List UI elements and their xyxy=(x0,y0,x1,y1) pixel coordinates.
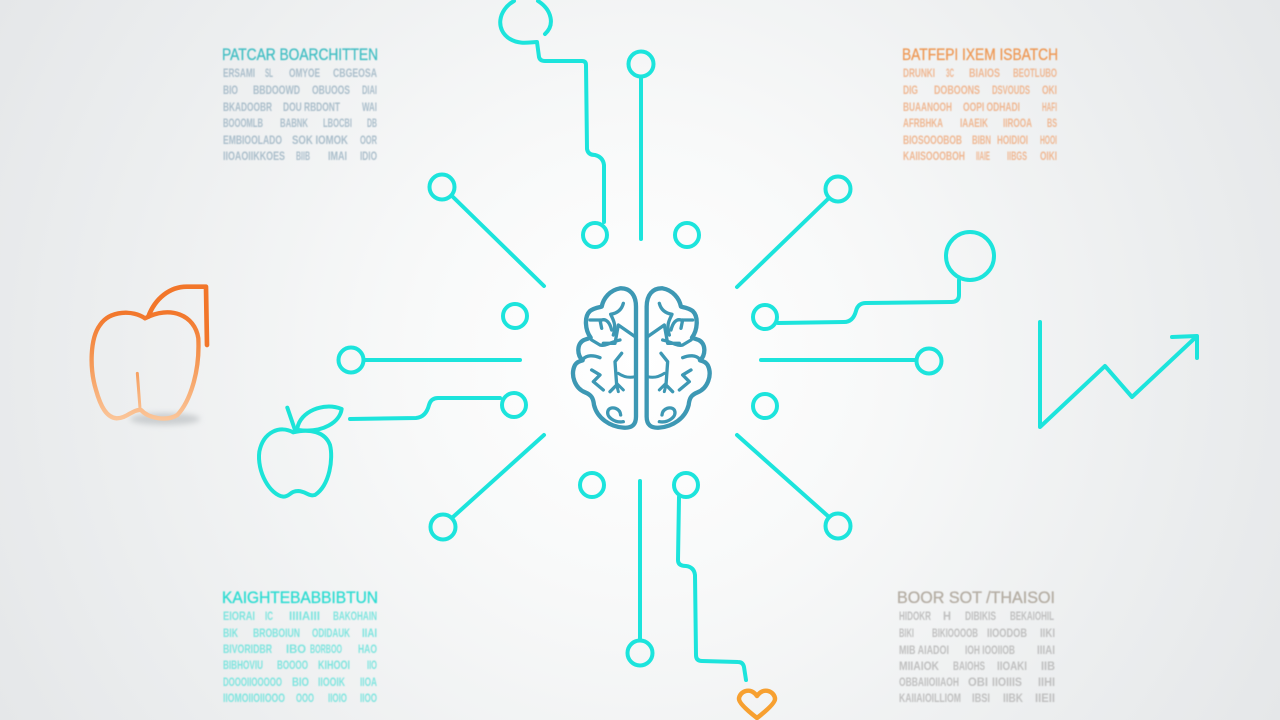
body text: bottom left: IIOA xyxy=(360,677,377,689)
body text: top left: OMYOE xyxy=(289,68,320,80)
connector: bottom to heart xyxy=(674,473,746,680)
body text: top left: BOOOMLB xyxy=(223,118,263,130)
body text: bottom right: KAIIAIOILLIOM xyxy=(899,693,961,705)
body text: top right: 3C xyxy=(946,68,954,80)
body text: top right: IAAEIK xyxy=(960,118,988,130)
body text: top left: SL xyxy=(265,68,273,80)
icon: orange heart xyxy=(739,691,775,718)
body text: bottom right: IIOODOB xyxy=(987,628,1027,640)
body text: bottom right: IIHI xyxy=(1038,677,1055,689)
body text: bottom left: EIORAI xyxy=(223,611,255,623)
body text: top left: BBDOOWD xyxy=(253,85,300,97)
body text: top right: DIG xyxy=(903,85,918,97)
body text: top right: BUAANOOH xyxy=(903,102,952,114)
body text: bottom left: ODIDAUK xyxy=(312,628,350,640)
body text: top right: BIBN xyxy=(972,135,991,147)
body text: top left: LBOCBI xyxy=(323,118,352,130)
body text: bottom right: H xyxy=(943,611,951,623)
icon: orange apple xyxy=(92,287,207,425)
node: bottom left of centre xyxy=(580,473,604,497)
body text: bottom right: IIKI xyxy=(1040,628,1055,640)
connector: upper left diagonal xyxy=(430,174,544,286)
body text: top left: BKADOOBR xyxy=(223,102,272,114)
body text: bottom left: BIVORIDBR xyxy=(223,644,273,656)
body text: bottom right xyxy=(899,611,1055,705)
heading: top left: PATCAR BOARCHITTEN xyxy=(222,46,378,64)
body text: bottom right: IIEII xyxy=(1035,693,1055,705)
body text: top right: DRUNKI xyxy=(903,68,935,80)
body text: bottom right: IBSI xyxy=(972,693,990,705)
brain: left hemisphere xyxy=(573,288,636,428)
body text: bottom left: BAKOHAIN xyxy=(333,611,377,623)
body text: bottom left: BROBOIUN xyxy=(253,628,300,640)
body text: bottom right: BIKI xyxy=(899,628,914,640)
connector: top large node xyxy=(500,1,607,247)
connector: right large node xyxy=(753,232,994,329)
node: right lower xyxy=(753,394,777,418)
text block: bottom left xyxy=(222,589,378,705)
body text: top left: BIO xyxy=(223,85,238,97)
body text: bottom right: BEKAIOHIL xyxy=(1010,611,1054,623)
body text: bottom left: KIHOOI xyxy=(318,660,350,672)
network connectors xyxy=(338,1,994,680)
body text: bottom right: MIIAIOK xyxy=(899,661,940,673)
body text: bottom left: DOOOIIOOOOO xyxy=(223,677,282,689)
connector: right straight xyxy=(761,348,942,374)
connector: lower right diagonal xyxy=(737,435,850,538)
body text: top left: IIOAOIIKKOES xyxy=(223,151,285,163)
body text: top right: BS xyxy=(1047,118,1057,130)
body text: top left: BABNK xyxy=(280,118,308,130)
body text: top left: DOU RBDONT xyxy=(283,102,340,114)
body text: top left: OOR xyxy=(360,135,377,147)
body text: top left: SOK IOMOK xyxy=(292,135,349,147)
body text: bottom left: IIIIAIII xyxy=(289,611,320,623)
node: top right of centre xyxy=(675,223,699,247)
body text: top left: ERSAMI xyxy=(223,68,255,80)
body text: bottom right: HIDOKR xyxy=(899,611,931,623)
body text: top left: EMBIOOLADO xyxy=(223,135,282,147)
body text: bottom right: MIB AIADOI xyxy=(899,645,949,657)
brain: right hemisphere xyxy=(647,288,710,428)
heading: bottom left: KAIGHTEBABBIBTUN xyxy=(222,589,378,607)
connector: bottom straight xyxy=(628,481,652,666)
connector: lower left diagonal xyxy=(430,435,544,540)
body text: bottom right: IOH IOOIIOB xyxy=(965,645,1015,657)
body text: top left: IMAI xyxy=(328,151,347,163)
body text: top right: BIOSOOOBOB xyxy=(903,135,962,147)
body text: bottom right: DIBIKIS xyxy=(965,611,996,623)
body text: bottom left: BORBOO xyxy=(310,644,342,656)
body text: bottom right: IIOAKI xyxy=(997,661,1027,673)
body text: top right: BIAIOS xyxy=(969,68,1000,80)
body text: bottom right: OBI xyxy=(968,677,988,689)
body text: top right: IIAIE xyxy=(976,151,990,163)
body text: bottom left: IIO xyxy=(367,660,377,672)
body text: top right: IIBGS xyxy=(1007,151,1027,163)
body text: top right: DOBOONS xyxy=(934,85,980,97)
chart: rising trend arrow xyxy=(1040,322,1197,427)
body text: top right: BEOTLUBO xyxy=(1013,68,1057,80)
body text: bottom right: IIBK xyxy=(1003,693,1024,705)
body text: bottom left: BOOOO xyxy=(277,660,308,672)
body text: bottom right: IIB xyxy=(1041,661,1055,673)
body text: top right: AFRBHKA xyxy=(903,118,943,130)
body text: bottom left: IBO xyxy=(286,644,306,656)
body text: bottom right: BIKIOOOOB xyxy=(932,628,978,640)
text block: top right xyxy=(902,46,1058,163)
text block: top left xyxy=(222,46,378,163)
body text: bottom left: IIAI xyxy=(362,628,377,640)
icon: teal apple xyxy=(259,407,342,497)
body text: top left xyxy=(223,68,377,163)
connector: upper right diagonal xyxy=(737,176,850,287)
body text: top left: CBGEOSA xyxy=(333,68,377,80)
body text: top right: OOPI ODHADI xyxy=(963,102,1020,114)
heading: bottom right: BOOR SOT /THAISOI xyxy=(897,589,1055,607)
body text: top right: DSVOUDS xyxy=(992,85,1030,97)
body text: top right: OIKI xyxy=(1040,151,1057,163)
body text: top left: DIAI xyxy=(362,85,377,97)
body text: top right: HOIDIOI xyxy=(997,135,1028,147)
heading: top right: BATFEPI IXEM ISBATCH xyxy=(902,46,1058,64)
body text: bottom right: BAIOHS xyxy=(953,661,985,673)
body text: bottom left: IIOOIK xyxy=(318,677,346,689)
body text: top left: WAI xyxy=(362,102,377,114)
body text: top right: HOOI xyxy=(1040,135,1057,147)
body text: bottom left: IIOMOIIOIIOOO xyxy=(223,693,285,705)
connector: left to apple xyxy=(350,393,526,419)
body text: bottom left: IIOIO xyxy=(328,693,347,705)
body text: top left: BIIB xyxy=(296,151,310,163)
body text: top right: KAIISOOOBOH xyxy=(903,151,965,163)
body text: bottom right: IIOIIIS xyxy=(992,677,1022,689)
body text: bottom right: OBBAIIOIIAOH xyxy=(899,677,959,689)
body text: bottom left: IIOO xyxy=(360,693,377,705)
body text: bottom left xyxy=(223,611,377,705)
body text: bottom right: IIIAI xyxy=(1037,645,1055,657)
body text: bottom left: BIO xyxy=(292,677,309,689)
body text: top left: DB xyxy=(367,118,377,130)
body text: top right: OKI xyxy=(1042,85,1057,97)
text block: bottom right xyxy=(897,589,1055,705)
icon: central brain xyxy=(573,288,710,428)
body text: bottom left: BIBHOVIU xyxy=(223,660,263,672)
body text: top right: IIROOA xyxy=(1003,118,1032,130)
node: left upper xyxy=(503,304,527,328)
body text: bottom left: HAO xyxy=(358,644,377,656)
body text: top left: IDIO xyxy=(360,151,377,163)
body text: top right: HAFI xyxy=(1042,102,1057,114)
connector: left straight xyxy=(338,348,520,372)
body text: bottom left: OOO xyxy=(296,693,314,705)
body text: top left: OBUOOS xyxy=(312,85,350,97)
body text: top right xyxy=(903,68,1057,163)
connector: top straight xyxy=(628,52,654,239)
body text: bottom left: BIK xyxy=(223,628,239,640)
body text: bottom left: IC xyxy=(265,611,273,623)
